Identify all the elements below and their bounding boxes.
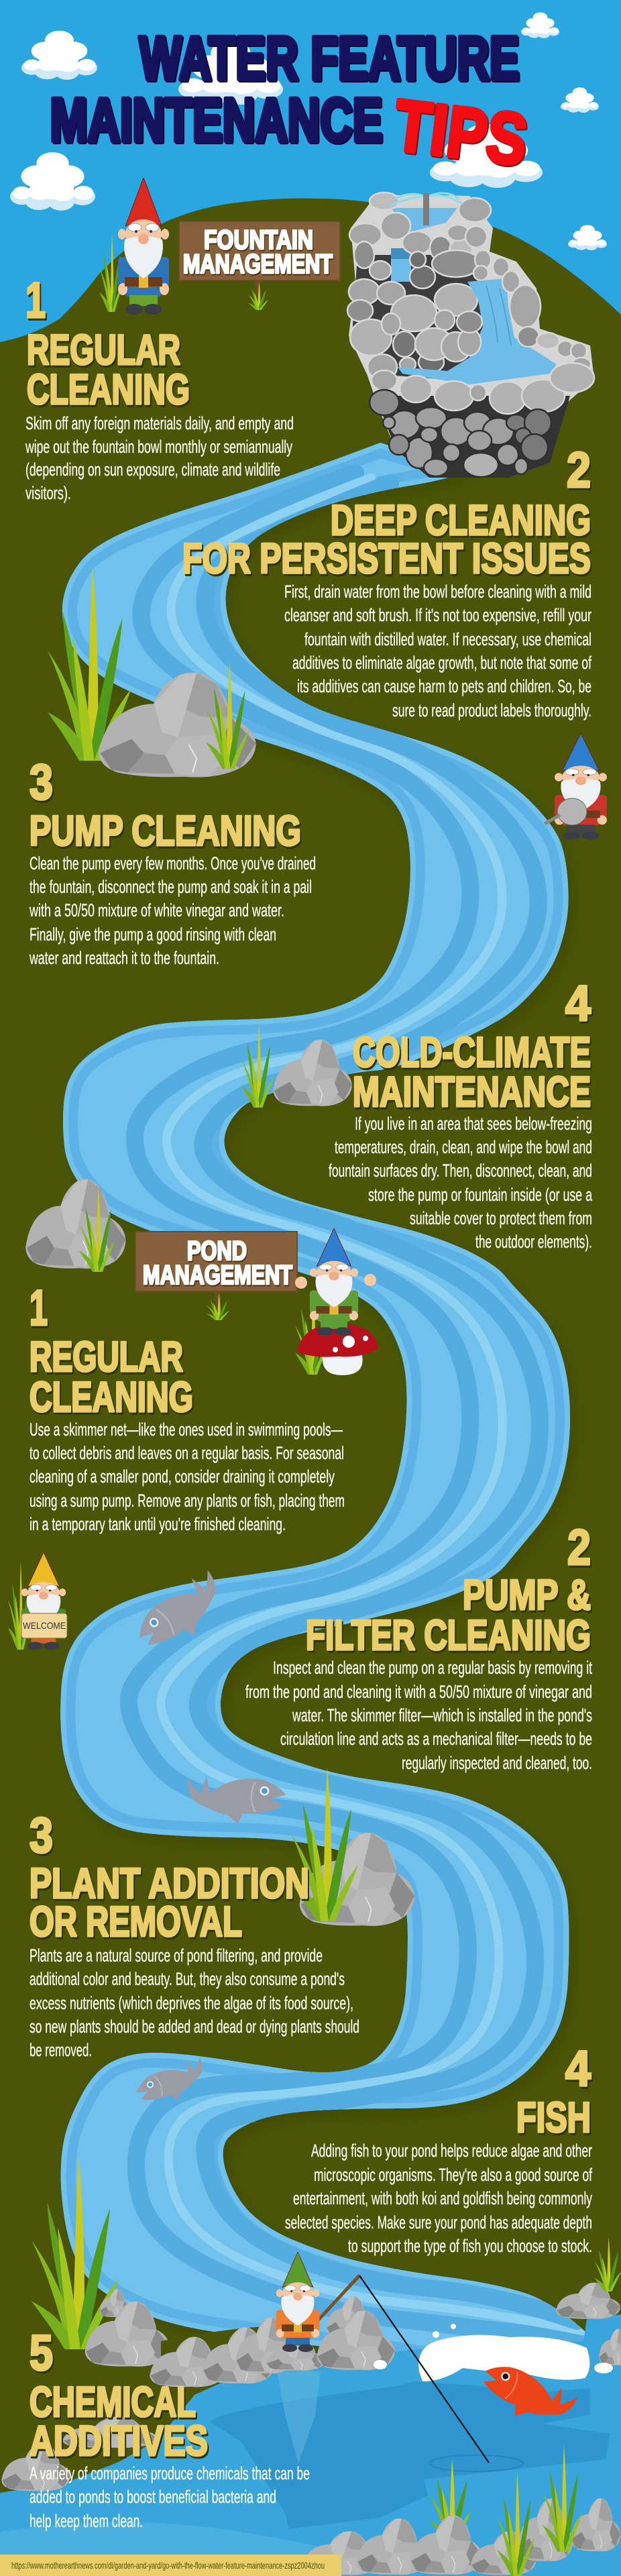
river shadow — [66, 449, 596, 2368]
clouds — [10, 12, 607, 250]
heading: PUMP CLEANING — [30, 808, 301, 855]
heading: FISH — [516, 2094, 591, 2141]
panel: fountain tip 4 — [329, 975, 593, 1252]
text block: to collect debris and leaves on a regular basis. For seasonal — [30, 1443, 344, 1463]
text block: be removed. — [30, 2040, 92, 2060]
heading — [182, 497, 591, 582]
text block: A variety of companies produce chemicals that can be — [30, 2463, 310, 2483]
text block — [30, 2463, 310, 2531]
number: 3 — [30, 1807, 53, 1863]
heading: REGULAR — [27, 327, 180, 374]
text block — [284, 582, 591, 720]
heading: CHEMICAL — [30, 2379, 196, 2426]
text block: Plants are a natural source of pond filtering, and provide — [30, 1945, 323, 1966]
text block — [245, 1658, 592, 1773]
heading — [30, 1860, 309, 1945]
heading: CLEANING — [30, 1374, 193, 1421]
gray fish 2 — [188, 1776, 286, 1824]
text block: Skim off any foreign materials daily, and empty and — [25, 413, 294, 433]
text block — [25, 413, 294, 503]
number: 4 — [565, 975, 591, 1031]
fishing gnome — [276, 2252, 359, 2352]
rock and grass: middle river — [241, 1023, 352, 1108]
river — [60, 443, 585, 2352]
number: 1 — [30, 1280, 48, 1336]
panel: fountain tip 3 — [29, 754, 316, 968]
heading — [30, 2379, 208, 2465]
panel: pond tip 5 — [30, 2325, 310, 2531]
grass behind red gnome — [99, 233, 123, 312]
source footer bar — [0, 2555, 341, 2576]
text block: Use a skimmer net—like the ones used in swimming pools— — [30, 1419, 343, 1440]
title — [50, 24, 531, 180]
gnome reflection — [277, 2371, 321, 2464]
pond — [0, 2314, 621, 2576]
text block: additional color and beauty. But, they also consume a pond's — [30, 1969, 345, 1989]
heading — [27, 327, 190, 413]
fishing line — [359, 2275, 489, 2463]
text block: added to ponds to boost beneficial bacteria and — [30, 2487, 276, 2507]
number: 2 — [567, 442, 591, 498]
text block — [285, 2141, 592, 2256]
rock and grass: left bank — [25, 1179, 125, 1272]
panel: fountain tip 1 — [25, 272, 294, 503]
text block: cleaning of a smaller pond, consider draining it completely — [30, 1466, 335, 1487]
sign: pond management: POND — [187, 1236, 247, 1266]
source footer bar: https://www.motherearthnews.com/di/garden-and-yard/go-with-the-flow-water-feature-maintenance-zspz2004zhou — [11, 2560, 325, 2571]
text block: Finally, give the pump a good rinsing with clean — [30, 924, 276, 945]
water foam — [374, 2324, 613, 2381]
heading — [353, 1029, 591, 1116]
heading: OR REMOVAL — [30, 1898, 242, 1945]
text block — [30, 1945, 359, 2060]
text block: so new plants should be added and dead or dying plants should — [30, 2017, 359, 2037]
heading: CLEANING — [27, 366, 190, 413]
panel: pond tip 1 — [30, 1280, 345, 1534]
text block: using a sump pump. Remove any plants or fish, placing them — [30, 1491, 345, 1511]
number: 3 — [30, 754, 53, 810]
red gnome — [118, 178, 169, 315]
gnome with watering can — [545, 733, 607, 840]
sign: fountain management — [179, 221, 340, 310]
fountain illustration — [347, 193, 594, 478]
gray fish 1 — [129, 1568, 234, 1662]
red fish — [473, 2355, 579, 2436]
gray fish 3 — [132, 2055, 211, 2112]
welcome gnome: WELCOME — [23, 1620, 66, 1631]
text block — [329, 1114, 593, 1252]
sign: pond management: MANAGEMENT — [143, 1260, 292, 1290]
number: 4 — [565, 2041, 591, 2096]
rocks at pond edge — [1, 2157, 621, 2491]
number: 5 — [30, 2325, 53, 2381]
text block: the fountain, disconnect the pump and soak it in a pail — [30, 877, 312, 897]
text block: wipe out the fountain bowl monthly or semiannually — [25, 437, 292, 457]
text block: in a temporary tank until you're finished cleaning. — [30, 1514, 286, 1534]
text block: help keep them clean. — [30, 2511, 143, 2531]
text block — [29, 853, 316, 968]
text block: water and reattach it to the fountain. — [29, 948, 219, 968]
sign: fountain management: FOUNTAIN — [204, 225, 313, 255]
bottom rocks and reeds — [302, 2445, 620, 2576]
text block: (depending on sun exposure, climate and wildlife — [25, 460, 280, 480]
gnome on mushroom — [295, 1228, 378, 1375]
panel: pond tip 2 — [245, 1519, 592, 1773]
heading: REGULAR — [30, 1334, 183, 1381]
text block: excess nutrients (which deprives the algae of its food source), — [30, 1993, 353, 2013]
number: 1 — [25, 272, 46, 328]
rock and grass: lower river — [291, 1768, 414, 1926]
number: 2 — [567, 1519, 591, 1575]
heading: PLANT ADDITION — [30, 1860, 309, 1907]
panel: fountain tip 2 — [182, 442, 591, 720]
heading — [30, 1334, 193, 1421]
text block: with a 50/50 mixture of white vinegar and water. — [29, 900, 284, 920]
panel: pond tip 4 — [285, 2041, 592, 2256]
text block: Clean the pump every few months. Once you've drained — [30, 853, 316, 873]
heading: ADDITIVES — [30, 2418, 208, 2465]
sign: pond management — [135, 1232, 297, 1320]
rock and grass cluster: upper river — [48, 566, 256, 777]
welcome gnome — [8, 1552, 67, 1650]
heading — [306, 1572, 591, 1659]
sign: fountain management: MANAGEMENT — [183, 250, 333, 279]
panel: pond tip 3 — [30, 1807, 359, 2060]
text block: visitors). — [25, 483, 71, 503]
title: TIPS — [390, 84, 531, 180]
title: MAINTENANCE — [50, 86, 382, 154]
text block — [30, 1419, 345, 1534]
